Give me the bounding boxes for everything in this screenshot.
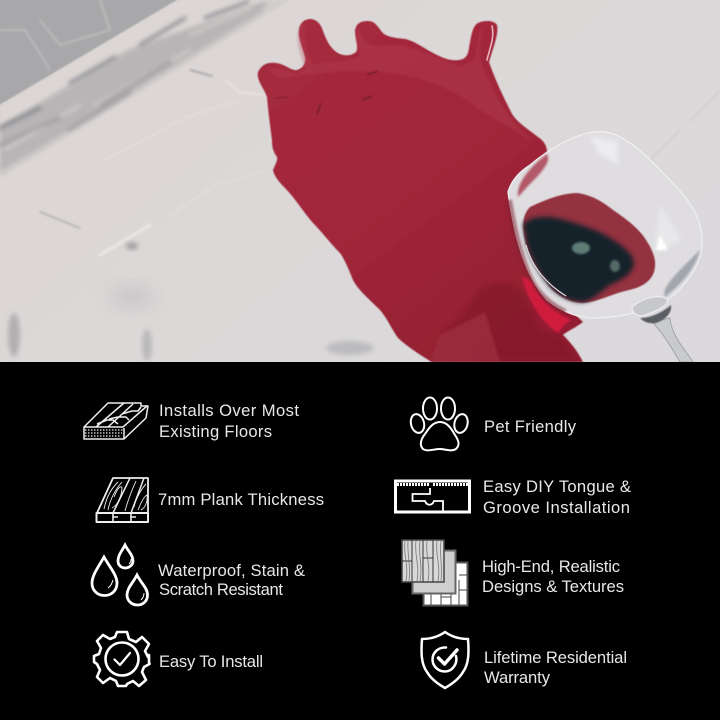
glass foot of stem ring	[632, 297, 668, 316]
icon: shield with check	[422, 632, 468, 688]
glass highlights	[658, 212, 678, 244]
icon: layered floor block	[84, 403, 148, 439]
feature: installs over most existing floors	[84, 401, 304, 441]
wine reflected under the glass	[522, 277, 571, 333]
text: lifetime residential warranty: Lifetime Residential	[484, 648, 627, 667]
text: lifetime residential warranty: Warranty	[484, 668, 551, 687]
wine glass	[508, 132, 702, 362]
icon: tongue and groove joint	[396, 481, 470, 512]
text: easy to install: Easy To Install	[159, 652, 263, 671]
icon: stacked floor samples	[402, 540, 468, 606]
text: installs over most existing floors: Installs Over Most	[159, 401, 299, 420]
text: high-end realistic designs and textures: Designs & Textures	[482, 577, 624, 596]
icon: three water drops	[92, 545, 148, 605]
panel: photo of spilled wine on marble floor	[0, 0, 720, 362]
marble floor	[0, 0, 720, 362]
feature: waterproof	[92, 545, 310, 605]
glass stem	[652, 318, 693, 362]
icon: paw print	[409, 398, 470, 450]
feature: realistic designs and textures	[402, 540, 624, 606]
text: waterproof, stain and scratch resistant: Waterproof, Stain &	[158, 561, 305, 580]
text: installs over most existing floors: Existing Floors	[159, 422, 272, 441]
feature: tongue and groove	[396, 477, 636, 517]
text: waterproof, stain and scratch resistant: Scratch Resistant	[159, 580, 283, 599]
feature: easy to install	[94, 632, 263, 686]
feature: pet friendly	[409, 398, 577, 450]
feature: 7mm plank thickness	[96, 478, 324, 522]
panel: black features area	[0, 362, 720, 720]
pooled wine in glass	[523, 193, 655, 303]
text: 7mm plank thickness: 7mm Plank Thickness	[158, 490, 324, 509]
glass bowl	[508, 132, 702, 318]
text: pet friendly: Pet Friendly	[484, 417, 577, 436]
wine spill puddle	[258, 19, 583, 362]
icon: gear with check	[94, 632, 150, 686]
text: high-end realistic designs and textures: High-End, Realistic	[482, 557, 620, 576]
icon: wooden plank	[96, 478, 148, 522]
text: easy diy tongue and groove installation: Easy DIY Tongue &	[483, 477, 631, 496]
text: easy diy tongue and groove installation: Groove Installation	[483, 498, 630, 517]
feature: lifetime residential warranty	[422, 632, 632, 688]
